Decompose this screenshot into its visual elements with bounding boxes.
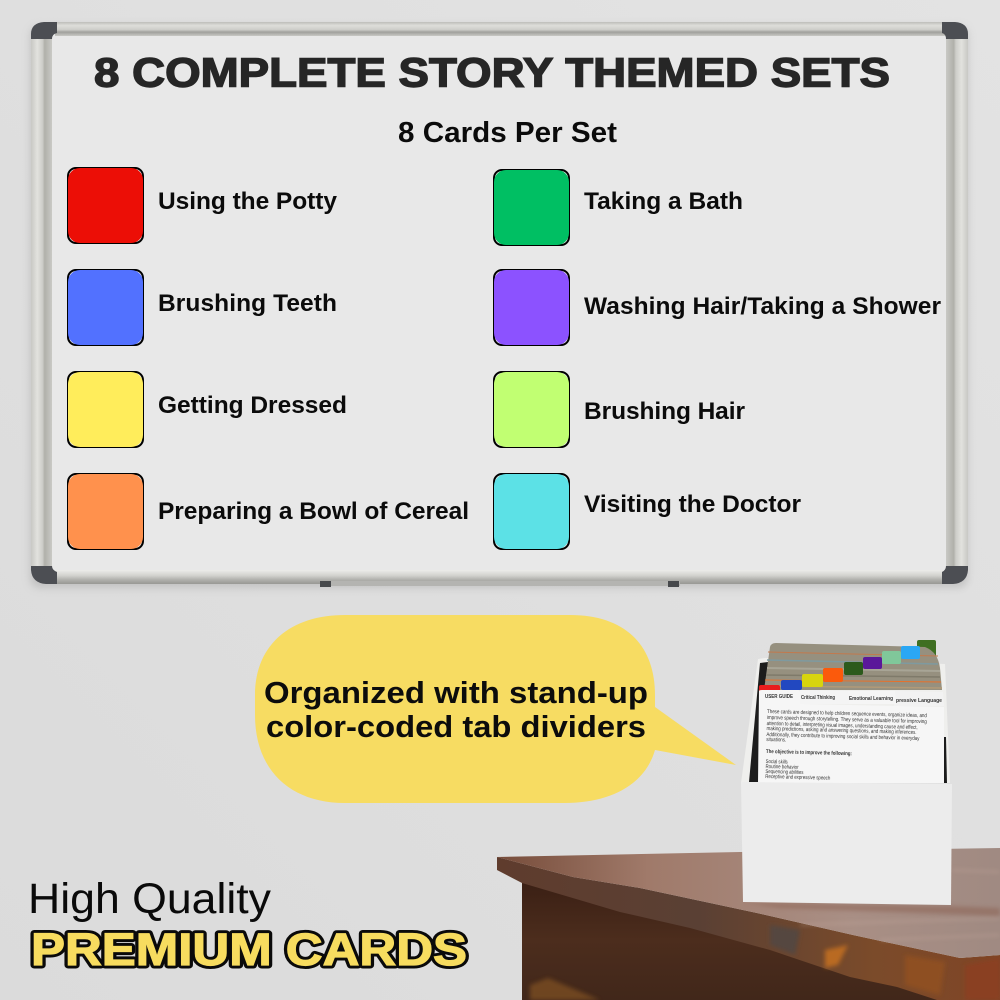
marker tray — [320, 581, 680, 587]
frame top rail — [55, 22, 945, 36]
card instructions: Additionally, they contribute to improving social skills and behavior in everyday — [766, 732, 920, 742]
wooden table — [497, 848, 1000, 1000]
user guide card — [758, 690, 944, 784]
white divider tabs: pressive Language — [896, 698, 942, 704]
tab: dark green far — [917, 640, 936, 660]
table top surface — [497, 848, 1000, 958]
card instructions: The objective is to improve the following: — [766, 749, 852, 757]
card instructions: Routine behavior — [765, 764, 799, 771]
card instructions: These cards are designed to help children sequence events, organize ideas, and — [767, 709, 927, 719]
title: 8 COMPLETE STORY THEMED SETS — [94, 50, 890, 96]
card instructions: Receptive and expressive speech — [765, 774, 830, 782]
label: Visiting the Doctor: Visiting the Doctor — [584, 491, 801, 518]
swatch: orange — [68, 474, 143, 549]
swatch: lime — [494, 372, 569, 447]
swatch: blue — [68, 270, 143, 345]
table leg and underside — [522, 880, 940, 1000]
card instructions: attention to detail, interpreting visual images, understanding cause and effect, — [767, 721, 918, 731]
tagline: High Quality — [28, 875, 272, 923]
dark box interior — [749, 662, 768, 782]
card instructions: Social skills — [766, 759, 788, 766]
card instructions: making predictions, asking and answering questions, and making inferences. — [766, 726, 917, 736]
table front edge — [497, 857, 1000, 1000]
subtitle: 8 Cards Per Set — [398, 117, 617, 149]
bubble body with tail — [255, 615, 736, 803]
user guide card: USER GUIDE — [765, 694, 793, 700]
corner top left — [31, 22, 57, 39]
product box with dividers — [741, 640, 952, 905]
label: Preparing a Bowl of Cereal: Preparing a Bowl of Cereal — [158, 498, 469, 525]
bubble line 1: Organized with stand-up — [264, 675, 648, 710]
frame left rail — [31, 38, 52, 570]
label: Using the Potty: Using the Potty — [158, 188, 337, 215]
white divider tabs: Emotional Learning — [849, 696, 893, 702]
swatch: cyan — [494, 474, 569, 549]
premium cards badge text: PREMIUM CARDS — [31, 924, 467, 975]
card instructions: improve speech through storytelling. They serve as a valuable tool for improving — [767, 715, 927, 725]
grain streaks — [800, 870, 1000, 940]
card stack — [764, 643, 942, 690]
box front panel — [741, 782, 952, 905]
bubble line 2: color-coded tab dividers — [266, 709, 646, 744]
white divider tabs: Critical Thinking — [801, 695, 835, 701]
corner bottom right — [942, 566, 968, 584]
whiteboard surface — [50, 34, 948, 572]
speech bubble callout — [255, 615, 736, 803]
premium cards badge text: PREMIUM CARDS — [31, 924, 467, 975]
frame right rail — [946, 38, 968, 570]
set list: right column — [494, 170, 941, 549]
set list: left column — [68, 168, 469, 549]
swatch: purple — [494, 270, 569, 345]
swatch: red — [68, 168, 143, 243]
corner bottom left — [31, 566, 57, 584]
label: Washing Hair/Taking a Shower: Washing Hair/Taking a Shower — [584, 293, 941, 320]
frame bottom rail — [55, 570, 945, 584]
card instructions: Sequencing abilities — [765, 769, 804, 776]
whiteboard — [30, 22, 968, 588]
edge highlights — [770, 925, 1000, 1000]
color tabs — [759, 646, 920, 693]
swatch: yellow — [68, 372, 143, 447]
white divider tabs — [800, 690, 944, 706]
swatch: green — [494, 170, 569, 245]
label: Brushing Teeth: Brushing Teeth — [158, 290, 337, 317]
label: Taking a Bath: Taking a Bath — [584, 188, 743, 215]
label: Getting Dressed: Getting Dressed — [158, 392, 347, 419]
corner top right — [942, 22, 968, 39]
underside highlight — [530, 978, 600, 1000]
box walls — [741, 658, 950, 783]
card instructions — [765, 709, 927, 784]
label: Brushing Hair: Brushing Hair — [584, 398, 745, 425]
shadow under box — [745, 903, 1000, 916]
card instructions: situations. — [766, 737, 786, 744]
